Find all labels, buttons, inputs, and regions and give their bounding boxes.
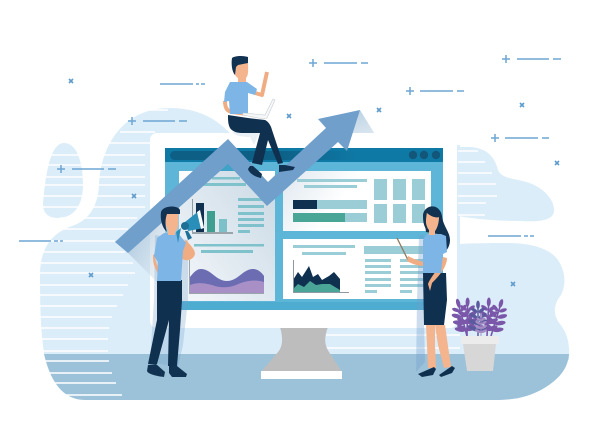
blob: large left (40, 108, 460, 354)
back arm (225, 101, 247, 114)
monitor frame (150, 133, 457, 328)
raised arm (255, 72, 267, 95)
stool (232, 132, 260, 145)
x marks (69, 79, 559, 286)
person: man with megaphone (147, 206, 204, 377)
body shadow (150, 235, 188, 367)
background blobs (40, 108, 569, 400)
floor (44, 354, 569, 400)
screen (165, 148, 443, 310)
hair back (424, 208, 450, 252)
monitor stand (261, 327, 342, 372)
decorative marks (19, 55, 561, 286)
area chart (189, 260, 264, 294)
hair front (423, 206, 441, 230)
mountain chart (293, 260, 349, 293)
pot rim (461, 336, 499, 344)
legs (426, 325, 436, 368)
hand arm (180, 240, 195, 260)
shirt (154, 233, 186, 281)
heading lines (194, 177, 264, 253)
window header (165, 148, 443, 162)
text lines (297, 179, 367, 182)
body shadow (416, 235, 425, 372)
megaphone (181, 210, 204, 240)
header dots (409, 151, 440, 159)
shoes (418, 367, 436, 377)
leaves (446, 296, 513, 339)
text lines (293, 245, 355, 248)
back arm (153, 254, 175, 287)
teal notch under peak (220, 163, 236, 171)
tile grid (374, 179, 425, 223)
monitor base (261, 371, 342, 379)
bar chart (192, 199, 233, 234)
trousers (148, 280, 182, 366)
neck and face (233, 62, 248, 84)
shoes (147, 364, 165, 377)
panel: left charts (179, 163, 275, 301)
progress bars (293, 200, 367, 222)
panel: bottom right (283, 239, 431, 299)
growth arrow (115, 110, 360, 253)
laptop (243, 99, 275, 119)
hair (161, 206, 180, 232)
pot body (463, 344, 496, 371)
header search pill (170, 151, 406, 160)
shirt (224, 82, 257, 114)
pointer (397, 238, 408, 260)
person: woman with pointer (397, 206, 455, 377)
trousers (228, 115, 283, 165)
face (165, 213, 178, 235)
collar strap (176, 228, 181, 243)
person: seated man (224, 56, 295, 178)
screen bottom band (165, 302, 443, 310)
shoes (248, 166, 262, 178)
arrow head shadow (335, 110, 384, 149)
arm with pointer (407, 256, 424, 266)
arm over skirt (428, 257, 447, 291)
face (426, 212, 439, 235)
blob: right cloud (458, 147, 554, 221)
shirt (423, 234, 447, 273)
white stripes (40, 110, 497, 395)
monitor (128, 133, 457, 379)
white panel corner (179, 171, 193, 184)
white patch above valley (253, 171, 275, 182)
blob: small left (43, 143, 83, 218)
skirt (423, 273, 447, 325)
potted plant (446, 296, 513, 371)
table (364, 246, 426, 293)
plus and dash lines (19, 55, 561, 241)
arrow shadow (128, 205, 179, 302)
blob: right lower (458, 243, 569, 360)
panel: top right (283, 171, 431, 231)
hair (232, 56, 248, 75)
